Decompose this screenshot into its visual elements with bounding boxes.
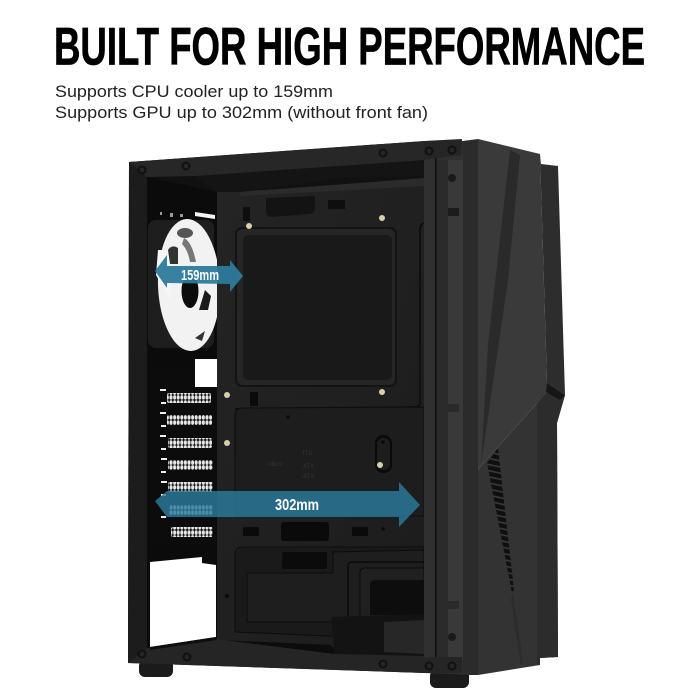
board labels: ITX xyxy=(303,451,312,457)
board labels: ATX xyxy=(303,464,314,470)
CPU cut-out frame xyxy=(235,227,397,387)
white slot xyxy=(195,212,215,219)
floor xyxy=(215,640,335,654)
top bracket band xyxy=(240,178,424,196)
fan xyxy=(148,218,222,352)
rear opening xyxy=(147,177,218,650)
dark stripe xyxy=(481,150,520,465)
arrow: 159mm CPU cooler clearance xyxy=(155,255,243,292)
arrow: 302mm GPU clearance xyxy=(155,482,420,527)
text block: specifications xyxy=(55,83,428,122)
lower front section xyxy=(478,383,565,675)
bottom rail xyxy=(128,639,425,673)
label: 159mm: 159mm xyxy=(181,268,219,284)
text block: specifications: Supports CPU cooler up to 159mm xyxy=(55,83,333,101)
lower plate panel xyxy=(235,547,424,640)
lower plate xyxy=(235,407,424,516)
white cut-out lower xyxy=(150,557,216,647)
frame screws xyxy=(138,150,386,668)
side section xyxy=(540,154,565,395)
case interior base xyxy=(128,141,425,673)
PC case xyxy=(128,139,565,688)
PSU box xyxy=(331,614,424,656)
PCI slot bracket xyxy=(152,368,217,546)
board labels xyxy=(268,451,314,480)
board labels: ATX xyxy=(303,474,314,480)
top rail xyxy=(129,141,425,177)
vent xyxy=(487,448,514,593)
text block: specifications: Supports GPU up to 302mm (without front fan) xyxy=(55,104,428,122)
screws xyxy=(224,215,385,468)
white slot square xyxy=(195,359,217,387)
label: 302mm: 302mm xyxy=(275,497,319,514)
front panel xyxy=(478,139,565,675)
fan frame xyxy=(148,220,214,348)
top bracket cut-out xyxy=(266,196,315,217)
top mesh xyxy=(195,160,424,192)
motherboard tray xyxy=(217,183,424,652)
vented slot covers xyxy=(167,393,213,537)
fan hub opening xyxy=(182,274,198,308)
left frame xyxy=(128,162,147,663)
upper front face xyxy=(478,139,547,470)
board labels: Micro xyxy=(268,462,283,468)
mounting holes xyxy=(225,392,385,598)
cable routing slot xyxy=(375,435,392,473)
lower crease xyxy=(511,593,523,666)
front pillar xyxy=(424,139,478,675)
CPU cut-out opening xyxy=(243,235,392,380)
rear fan mount detail xyxy=(160,212,183,217)
PSU shroud steps xyxy=(247,550,424,622)
case feet xyxy=(139,660,469,688)
fan ring and blades xyxy=(156,218,222,352)
notch facet xyxy=(546,383,565,400)
upper plate outline xyxy=(235,223,424,409)
